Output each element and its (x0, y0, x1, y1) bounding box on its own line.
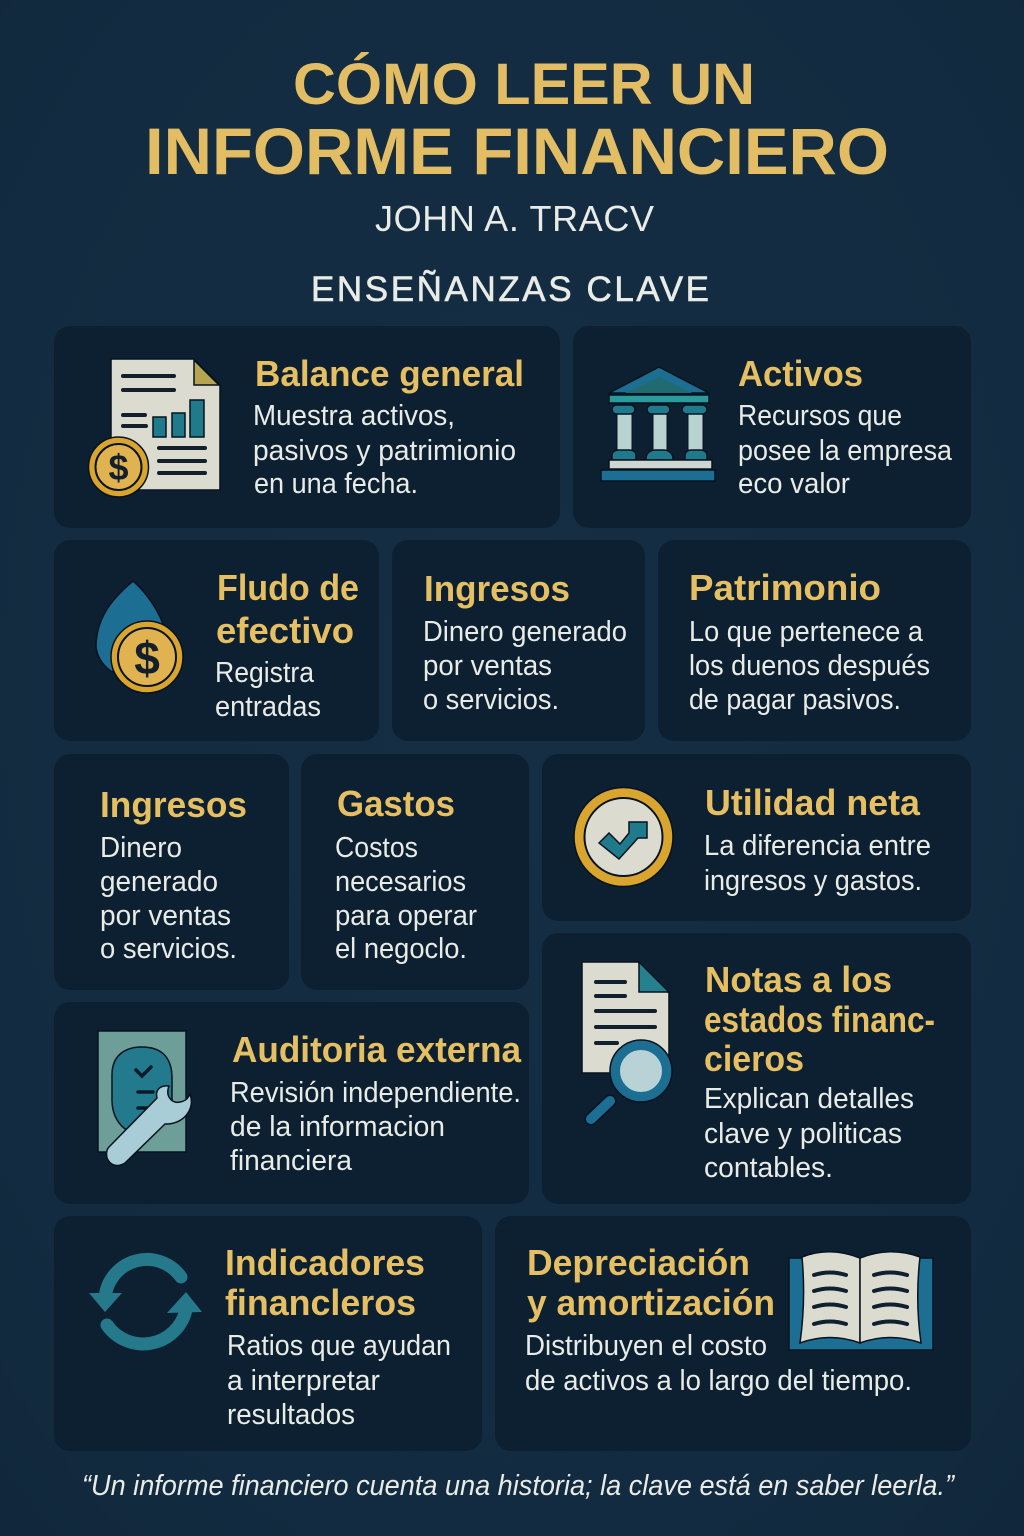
panel: activos (573, 326, 971, 528)
text block: Dinero generado (423, 616, 627, 648)
quote: “Un informe financiero cuenta una historia; la clave está en saber leerla.” (82, 1470, 955, 1502)
text block: pasivos y patrimionio (253, 435, 516, 467)
text block: La diferencia entre (704, 830, 931, 862)
icon: audit document with wrench (98, 1031, 191, 1165)
panel: gastos (301, 754, 529, 990)
heading: Patrimonio (689, 567, 881, 608)
text block (100, 832, 237, 965)
text block: los duenos después (689, 650, 930, 682)
text block (525, 1330, 912, 1397)
title (145, 52, 889, 188)
panel: ingresos (fila 3) (54, 754, 289, 990)
heading: Auditoria externa (232, 1029, 522, 1070)
heading: Notas a los (705, 959, 892, 1000)
heading: Balance general (255, 353, 524, 394)
author: JOHN A. TRACV (375, 198, 654, 239)
panel: balance general (54, 326, 560, 528)
text block: de activos a lo largo del tiempo. (525, 1365, 912, 1397)
text block: Revisión independiente. (230, 1077, 521, 1109)
icon: check mark badge (574, 788, 673, 886)
heading: Depreciación (527, 1242, 750, 1283)
text block (704, 1083, 914, 1184)
icon: open book (789, 1252, 933, 1350)
text block: generado (100, 866, 218, 898)
panel: flujo de efectivo (54, 540, 379, 741)
panel: auditoria externa (54, 1002, 529, 1204)
text block: de pagar pasivos. (689, 684, 901, 716)
icon: drop with coin (96, 581, 183, 693)
text block: Muestra activos, (253, 400, 455, 432)
text block: clave y politicas (704, 1118, 902, 1150)
text block: resultados (227, 1399, 355, 1431)
text block: Dinero (100, 832, 182, 864)
text block: entradas (215, 691, 321, 723)
heading: Activos (738, 353, 863, 394)
icon: document with chart and coin: $ (108, 447, 129, 488)
text block (253, 400, 516, 500)
text block: Recursos que (738, 400, 902, 432)
panel: patrimonio (658, 540, 971, 741)
heading (527, 1242, 775, 1323)
title: INFORME FINANCIERO (145, 114, 889, 188)
heading: cieros (704, 1038, 804, 1079)
text block: Costos (335, 832, 418, 864)
text block (227, 1330, 451, 1431)
heading: Ingresos (424, 568, 570, 609)
heading (225, 1242, 425, 1323)
icon: document with magnifier (582, 962, 672, 1119)
text block (423, 616, 627, 716)
heading: estados financ- (704, 999, 935, 1040)
heading: Fludo de (217, 567, 359, 608)
text block (215, 657, 321, 723)
text block (335, 832, 477, 965)
text block (738, 400, 953, 500)
heading: Gastos (337, 783, 455, 824)
text block: por ventas (423, 650, 552, 682)
text block: el negoclo. (335, 933, 467, 965)
panel: notas a los estados financieros (542, 933, 971, 1204)
icon: drop with coin: $ (134, 632, 160, 684)
title: CÓMO LEER UN (293, 52, 755, 117)
text block (704, 830, 931, 897)
heading: y amortización (527, 1282, 775, 1323)
text block (230, 1077, 521, 1177)
text block: o servicios. (423, 684, 559, 716)
text block: a interpretar (227, 1365, 380, 1397)
panel: indicadores financieros (54, 1216, 482, 1451)
text block: Lo que pertenece a (689, 616, 924, 648)
text block: ingresos y gastos. (704, 865, 922, 897)
heading: financleros (225, 1282, 416, 1323)
text block: eco valor (738, 468, 850, 500)
text block: Registra (215, 657, 315, 689)
heading (704, 959, 935, 1079)
text block: Explican detalles (704, 1083, 914, 1115)
section heading: ENSEÑANZAS CLAVE (311, 270, 709, 309)
panel: ingresos (fila 2) (392, 540, 645, 741)
text block (689, 616, 930, 716)
icon: bank building (601, 367, 715, 481)
text block: Distribuyen el costo (525, 1330, 767, 1362)
heading: Ingresos (100, 784, 247, 825)
text block: para operar (335, 900, 477, 932)
panel: utilidad neta (542, 754, 971, 921)
icon: circular arrows (89, 1259, 202, 1344)
heading (216, 567, 359, 651)
text block: contables. (704, 1152, 833, 1184)
text block: o servicios. (100, 933, 237, 965)
heading: Indicadores (225, 1242, 425, 1283)
heading: efectivo (216, 610, 354, 651)
text block: financiera (230, 1145, 353, 1177)
panel: depreciación y amortización (495, 1216, 971, 1451)
text block: posee la empresa (738, 435, 953, 467)
text block: en una fecha. (254, 468, 418, 500)
text block: necesarios (335, 866, 466, 898)
text block: de la informacion (230, 1111, 445, 1143)
text block: Ratios que ayudan (227, 1330, 451, 1362)
text block: por ventas (100, 900, 231, 932)
heading: Utilidad neta (705, 782, 921, 823)
icon: document with chart and coin (88, 359, 220, 497)
